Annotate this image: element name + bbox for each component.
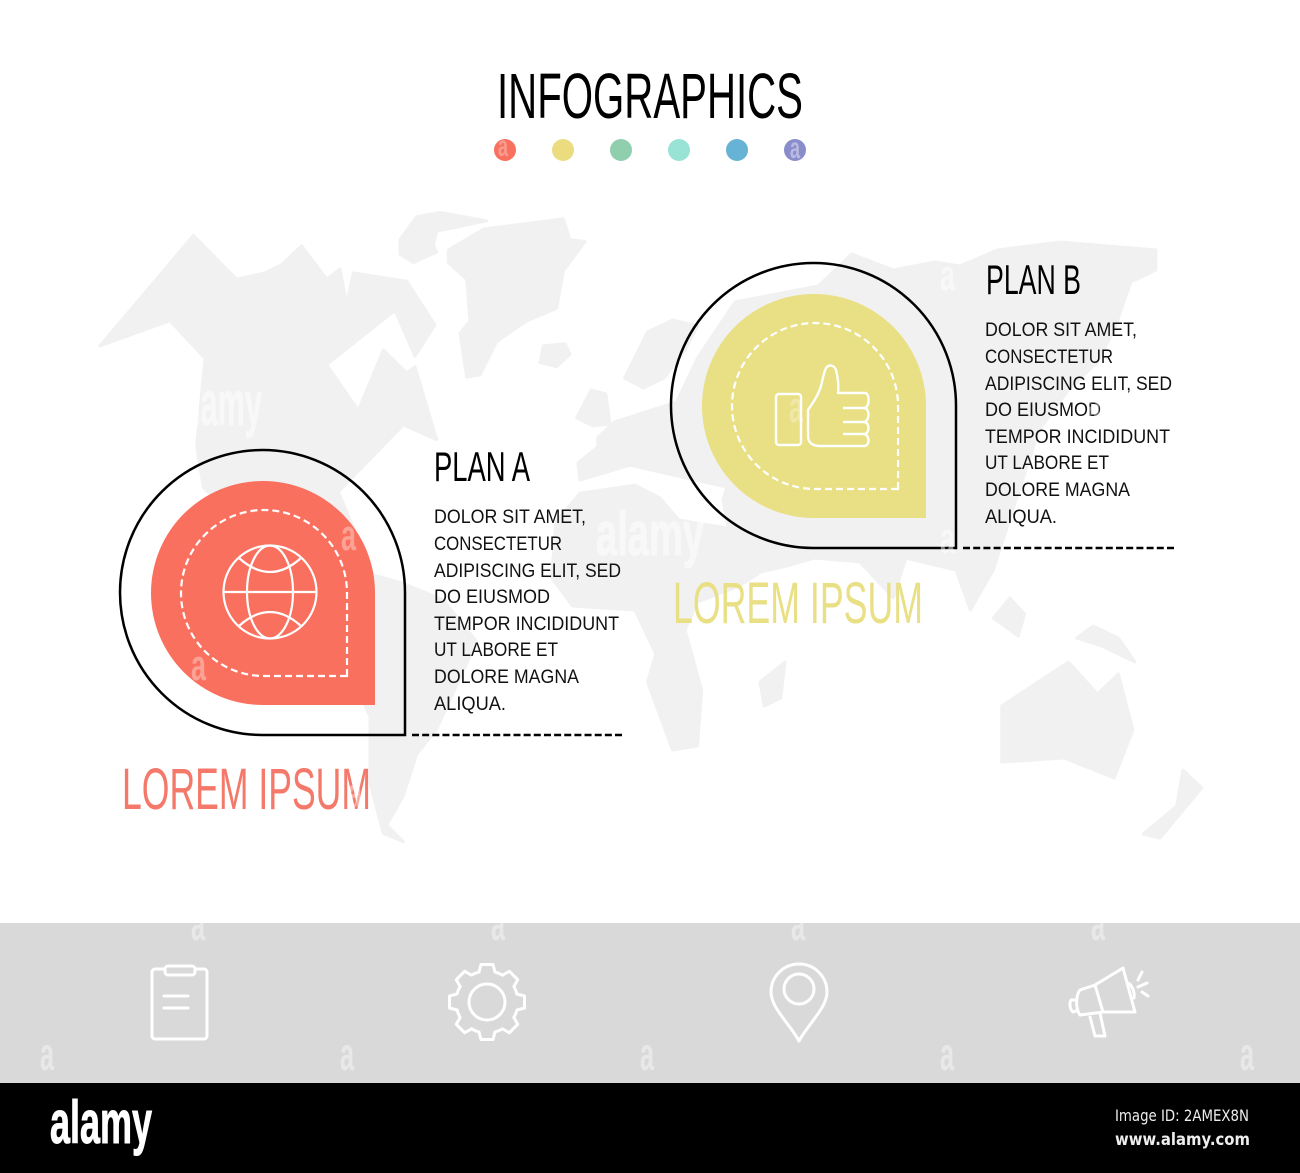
plan B body text: DOLORE MAGNA xyxy=(985,480,1130,501)
plan B caption: LOREM IPSUM xyxy=(673,571,923,636)
plan A body text: DOLORE MAGNA xyxy=(434,667,579,688)
stock watermarks: a xyxy=(191,641,206,690)
plan A body text: ALIQUA. xyxy=(434,694,506,715)
stock watermarks: a xyxy=(40,1028,54,1080)
plan A heading: PLAN A xyxy=(434,443,530,490)
stock watermarks: a xyxy=(498,130,508,163)
stock watermarks: a xyxy=(940,1028,954,1080)
footer logo: alamy xyxy=(50,1089,152,1156)
plan A body text: TEMPOR INCIDIDUNT xyxy=(434,614,619,635)
plan B heading: PLAN B xyxy=(986,256,1081,303)
icon: thumbs up xyxy=(776,366,869,446)
footer image id and url: Image ID: 2AMEX8N xyxy=(1115,1106,1249,1125)
stock watermarks: a xyxy=(347,769,362,818)
plan B dashed rule xyxy=(963,547,1174,549)
stock watermarks: lamy xyxy=(192,370,262,439)
plan B body text: DOLOR SIT AMET, xyxy=(985,320,1137,341)
stock watermarks: a xyxy=(1091,898,1105,950)
plan B body text: TEMPOR INCIDIDUNT xyxy=(985,427,1170,448)
stock watermarks: a xyxy=(640,1028,654,1080)
plan B body text: CONSECTETUR xyxy=(985,347,1113,368)
stock watermarks: a xyxy=(191,898,205,950)
icon: clipboard xyxy=(152,966,207,1039)
plan A body text: CONSECTETUR xyxy=(434,534,562,555)
plan B body text: ADIPISCING ELIT, SED xyxy=(985,374,1172,395)
plan A body text: DO EIUSMOD xyxy=(434,587,550,608)
bottom grey band xyxy=(0,923,1300,1083)
plan B body text: UT LABORE ET xyxy=(985,453,1109,474)
map: North and South America xyxy=(100,213,585,842)
icon: globe xyxy=(224,546,316,638)
stock watermarks: a xyxy=(940,514,955,563)
stock watermarks: a xyxy=(1086,381,1101,430)
plan A dashed rule xyxy=(412,734,622,736)
plan A body text: UT LABORE ET xyxy=(434,640,558,661)
colour dots row xyxy=(494,139,806,161)
icon: gear xyxy=(450,964,524,1040)
plan A caption: LOREM IPSUM xyxy=(122,757,371,822)
footer image id and url xyxy=(1115,1106,1250,1150)
footer image id and url: www.alamy.com xyxy=(1115,1130,1250,1150)
stock watermarks xyxy=(40,130,1254,1080)
plan B body text: DO EIUSMOD xyxy=(985,400,1101,421)
plan B pin outline xyxy=(671,263,956,548)
plan A body text: DOLOR SIT AMET, xyxy=(434,507,586,528)
stock watermarks: a xyxy=(791,898,805,950)
stock watermarks: a xyxy=(341,511,356,560)
world map background xyxy=(100,213,1202,842)
icon: megaphone xyxy=(1070,968,1148,1036)
plan B body text xyxy=(985,320,1172,528)
stock watermarks: a xyxy=(789,383,803,432)
panel: plan B xyxy=(671,256,1174,636)
map: Eurasia, Africa and Australia xyxy=(552,242,1202,838)
stock watermarks: a xyxy=(790,132,800,165)
plan B pin fill xyxy=(702,294,926,518)
stock watermarks: alamy xyxy=(596,500,704,569)
stock watermarks: a xyxy=(491,898,505,950)
footer black bar xyxy=(0,1083,1300,1173)
plan A body text xyxy=(434,507,621,715)
stock watermarks: a xyxy=(340,1028,354,1080)
stock watermarks: a xyxy=(1240,1028,1254,1080)
plan A body text: ADIPISCING ELIT, SED xyxy=(434,561,621,582)
plan A dashed inner outline xyxy=(181,510,347,676)
plan B body text: ALIQUA. xyxy=(985,507,1057,528)
plan B dashed inner outline xyxy=(732,323,898,489)
stock watermarks: a xyxy=(940,251,955,300)
icon: map pin xyxy=(771,964,827,1041)
plan A pin outline xyxy=(120,450,405,735)
panel: plan A xyxy=(120,443,622,822)
plan A pin fill xyxy=(151,481,375,705)
title: INFOGRAPHICS xyxy=(497,60,803,132)
